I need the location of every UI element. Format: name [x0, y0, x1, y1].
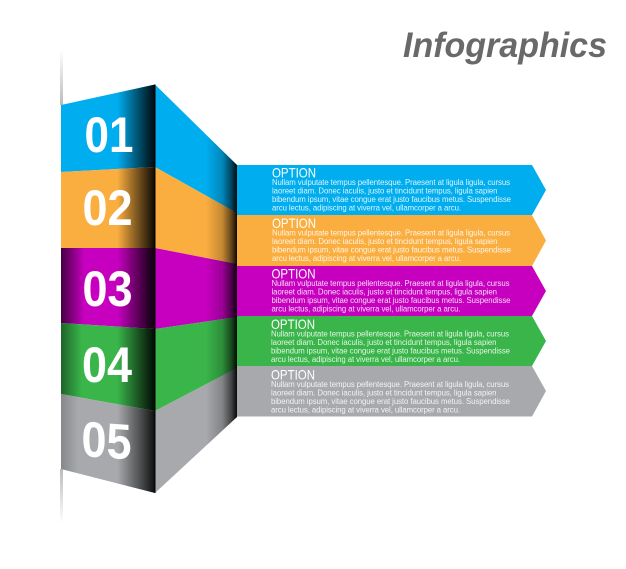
body text: laoreet diam. Donec iaculis, justo et tincidunt tempus, ligula sapien: [271, 338, 496, 347]
segment 05: [61, 394, 155, 493]
body text: bibendum ipsum, vitae congue erat justo faucibus metus. Suspendisse: [272, 296, 510, 305]
body text: laoreet diam. Donec iaculis, justo et tincidunt tempus, ligula sapien: [272, 288, 497, 296]
body text: bibendum ipsum, vitae congue erat justo faucibus metus. Suspendisse: [272, 195, 511, 204]
body text: bibendum ipsum, vitae congue erat justo faucibus metus. Suspendisse: [272, 246, 511, 254]
arrow: option 3: [237, 266, 546, 316]
body text: [271, 330, 510, 364]
segment 01: [61, 84, 155, 172]
segment 03: [61, 248, 155, 329]
body text: arcu lectus, adipiscing at viverra vel, ullamcorper a arcu.: [272, 204, 461, 212]
arrow: option 1: [237, 164, 546, 215]
heading: OPTION: [272, 164, 316, 180]
body text: bibendum ipsum, vitae congue erat justo faucibus metus. Suspendisse: [271, 346, 510, 356]
body text: Nullam vulputate tempus pellentesque. Praesent at ligula ligula, cursus: [271, 330, 509, 338]
heading: OPTION: [271, 316, 315, 332]
fold line: [154, 84, 156, 493]
panel: left folded face: [61, 84, 155, 493]
wall shadow strips: [60, 50, 63, 523]
body text: arcu lectus, adipiscing at viverra vel, ullamcorper a arcu.: [272, 304, 460, 314]
title: Infographics: [403, 26, 607, 65]
number 05: 05: [82, 412, 132, 471]
body text: laoreet diam. Donec iaculis, justo et tincidunt tempus, ligula sapien: [271, 388, 496, 398]
body text: laoreet diam. Donec iaculis, justo et tincidunt tempus, ligula sapien: [272, 186, 498, 196]
body text: [272, 178, 511, 212]
body text: Nullam vulputate tempus pellentesque. Praesent at ligula ligula, cursus: [272, 178, 510, 187]
body text: [272, 228, 511, 263]
body text: Nullam vulputate tempus pellentesque. Praesent at ligula ligula, cursus: [271, 380, 509, 389]
number 04: 04: [82, 338, 133, 394]
body text: arcu lectus, adipiscing at viverra vel, ullamcorper a arcu.: [272, 254, 461, 263]
body text: bibendum ipsum, vitae congue erat justo faucibus metus. Suspendisse: [271, 397, 510, 406]
body text: [271, 380, 510, 414]
panel: right folded face: [155, 84, 237, 493]
fold shadow: [155, 84, 237, 493]
body text: laoreet diam. Donec iaculis, justo et tincidunt tempus, ligula sapien: [272, 237, 498, 246]
arrow: option 4: [237, 316, 546, 366]
body text: Nullam vulputate tempus pellentesque. Praesent at ligula ligula, cursus: [272, 279, 510, 288]
number 03: 03: [82, 262, 133, 318]
heading: OPTION: [271, 366, 315, 382]
band green: [155, 317, 237, 411]
body text: arcu lectus, adipiscing at viverra vel, ullamcorper a arcu.: [271, 406, 460, 414]
segment 04: [61, 323, 155, 411]
heading: OPTION: [272, 215, 316, 231]
arrow: option 5: [237, 366, 546, 416]
band orange: [155, 167, 237, 264]
band grey: [155, 368, 237, 493]
segment 02: [61, 167, 155, 248]
number 02: 02: [82, 181, 133, 237]
arrow: option 2: [237, 215, 546, 266]
band purple: [155, 248, 237, 329]
body text: [272, 279, 510, 314]
body text: arcu lectus, adipiscing at viverra vel, ullamcorper a arcu.: [271, 355, 460, 364]
body text: Nullam vulputate tempus pellentesque. Praesent at ligula ligula, cursus: [272, 228, 510, 238]
band blue: [155, 84, 237, 213]
heading: OPTION: [272, 266, 316, 282]
number 01: 01: [84, 106, 133, 163]
